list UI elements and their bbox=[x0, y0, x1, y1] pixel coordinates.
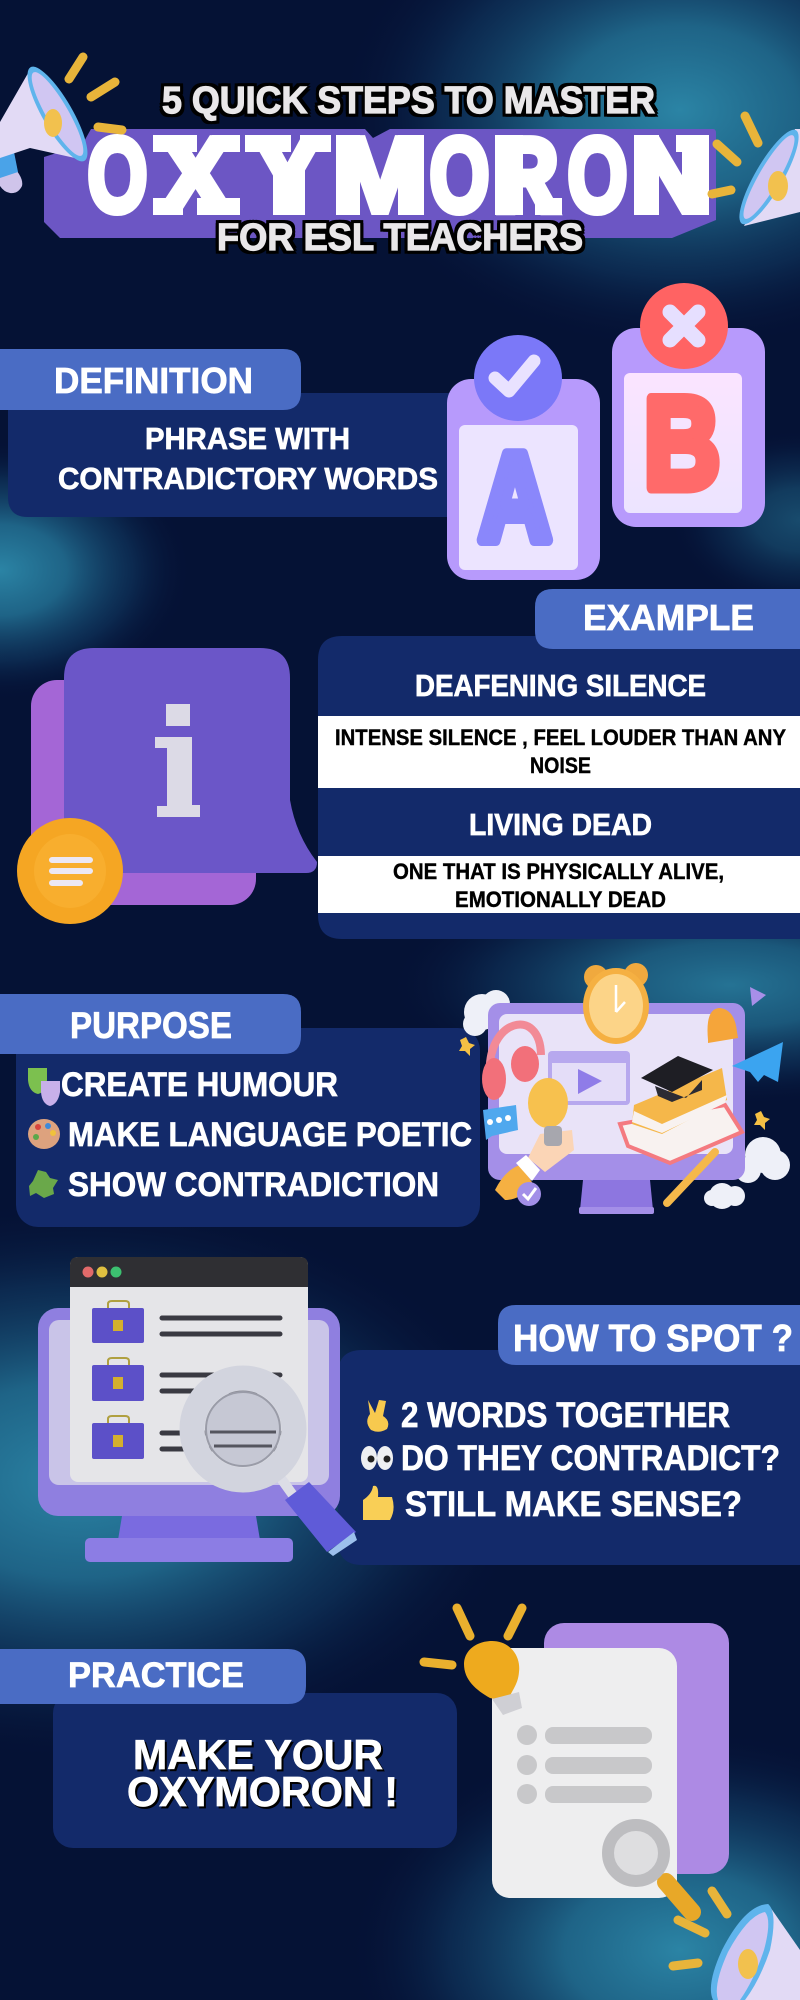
graduation cap bbox=[641, 1056, 713, 1092]
definition tab bbox=[0, 349, 301, 410]
paper plane bbox=[732, 1042, 783, 1082]
practice heading: PRACTICE bbox=[68, 1656, 244, 1695]
icon: victory hand bbox=[367, 1400, 388, 1432]
headphones bbox=[490, 1025, 541, 1075]
practice call to action: MAKE YOUR bbox=[133, 1731, 383, 1778]
monitor bbox=[38, 1308, 340, 1516]
icon: info speech bubble bbox=[17, 648, 317, 924]
back sheet bbox=[544, 1623, 729, 1874]
term: living dead: LIVING DEAD bbox=[469, 807, 652, 842]
definition text: PHRASE WITH bbox=[145, 421, 350, 456]
example body bbox=[318, 636, 800, 939]
example tab bbox=[535, 589, 800, 649]
stars bbox=[459, 1037, 770, 1130]
speech bubble bbox=[483, 1105, 518, 1140]
pencil bbox=[667, 1152, 715, 1203]
light bulb bbox=[464, 1641, 519, 1702]
how to spot item 1: 2 WORDS TOGETHER bbox=[401, 1396, 730, 1435]
practice tab bbox=[0, 1649, 306, 1704]
small paper shape bbox=[750, 987, 766, 1006]
panel: example bbox=[318, 589, 800, 939]
magnifying glass bbox=[275, 1470, 300, 1505]
heading: oxymoron: Y bbox=[254, 116, 321, 234]
icon: megaphone top left bbox=[0, 57, 122, 193]
list rows bbox=[517, 1725, 652, 1804]
definition text bbox=[58, 421, 438, 496]
icon: answer card B bbox=[612, 283, 765, 527]
icon: answer card B: B bbox=[644, 370, 720, 516]
purpose tab bbox=[0, 994, 301, 1054]
video window bbox=[548, 1051, 630, 1105]
heading: oxymoron: O bbox=[568, 116, 628, 234]
bulb rays bbox=[424, 1608, 522, 1665]
heading: for esl teachers: FOR ESL TEACHERS bbox=[217, 217, 583, 259]
meaning band 2: ONE THAT IS PHYSICALLY ALIVE, bbox=[393, 859, 724, 884]
hand holding bulb bbox=[528, 1130, 574, 1172]
practice call to action: OXYMORON ! bbox=[127, 1768, 398, 1815]
icon: thumbs up bbox=[363, 1486, 394, 1520]
purpose body bbox=[16, 1028, 480, 1227]
heading: 5 quick steps to master: 5 QUICK STEPS TO MASTER bbox=[162, 80, 655, 122]
heading: oxymoron: R bbox=[493, 116, 559, 234]
clouds bbox=[463, 990, 790, 1209]
icon: answer card A bbox=[447, 335, 600, 580]
heading: oxymoron: M bbox=[333, 116, 427, 234]
briefcase rows bbox=[92, 1308, 144, 1459]
practice body bbox=[53, 1693, 457, 1848]
heading: oxymoron: X bbox=[160, 116, 231, 234]
monitor bbox=[488, 1003, 745, 1180]
how to spot tab bbox=[498, 1305, 800, 1365]
panel: purpose bbox=[0, 994, 480, 1227]
front sheet bbox=[492, 1648, 677, 1898]
illustration: document with bulb bbox=[424, 1608, 729, 1912]
title block bbox=[44, 80, 716, 259]
magnifier handle bbox=[666, 1882, 692, 1912]
bell bbox=[708, 1008, 738, 1043]
illustration: job listing monitor bbox=[38, 1257, 357, 1562]
icon: puzzle piece bbox=[29, 1170, 58, 1198]
icon: theatre masks bbox=[28, 1068, 60, 1106]
practice call to action bbox=[127, 1731, 398, 1815]
icon: eyes bbox=[361, 1446, 393, 1470]
check badge bbox=[517, 1182, 541, 1206]
term: deafening silence: DEAFENING SILENCE bbox=[415, 668, 706, 703]
magnifier lens bbox=[608, 1825, 664, 1881]
meaning band 2: EMOTIONALLY DEAD bbox=[455, 887, 666, 912]
panel: practice bbox=[0, 1649, 457, 1848]
alarm clock bbox=[584, 965, 608, 989]
example heading: EXAMPLE bbox=[583, 597, 754, 638]
panel: how to spot bbox=[338, 1305, 800, 1565]
definition heading: DEFINITION bbox=[54, 360, 253, 401]
icon: palette bbox=[28, 1119, 60, 1149]
icon: answer card A: A bbox=[479, 429, 551, 567]
how to spot body bbox=[338, 1350, 800, 1565]
how to spot item 3: STILL MAKE SENSE? bbox=[405, 1485, 742, 1524]
title backing plate bbox=[44, 129, 716, 238]
purpose heading: PURPOSE bbox=[70, 1005, 232, 1046]
meaning band 1: NOISE bbox=[530, 753, 591, 778]
icon: megaphone bottom right bbox=[673, 1891, 800, 2000]
meaning band 1 bbox=[318, 716, 800, 788]
purpose item 2: MAKE LANGUAGE POETIC bbox=[68, 1116, 472, 1154]
definition text: CONTRADICTORY WORDS bbox=[58, 461, 438, 496]
heading: oxymoron bbox=[88, 116, 710, 234]
purpose item 1: CREATE HUMOUR bbox=[61, 1066, 338, 1104]
meaning band 2 bbox=[318, 856, 800, 913]
heading: oxymoron: O bbox=[88, 116, 148, 234]
icon: megaphone top right bbox=[712, 116, 800, 231]
books bbox=[620, 1105, 742, 1163]
heading: oxymoron: N bbox=[631, 116, 710, 234]
heading: oxymoron: O bbox=[430, 116, 490, 234]
purpose item 3: SHOW CONTRADICTION bbox=[68, 1166, 439, 1204]
definition body bbox=[8, 393, 478, 517]
browser window bbox=[70, 1257, 308, 1482]
illustration: online learning monitor bbox=[459, 963, 790, 1214]
panel: definition bbox=[0, 349, 478, 517]
